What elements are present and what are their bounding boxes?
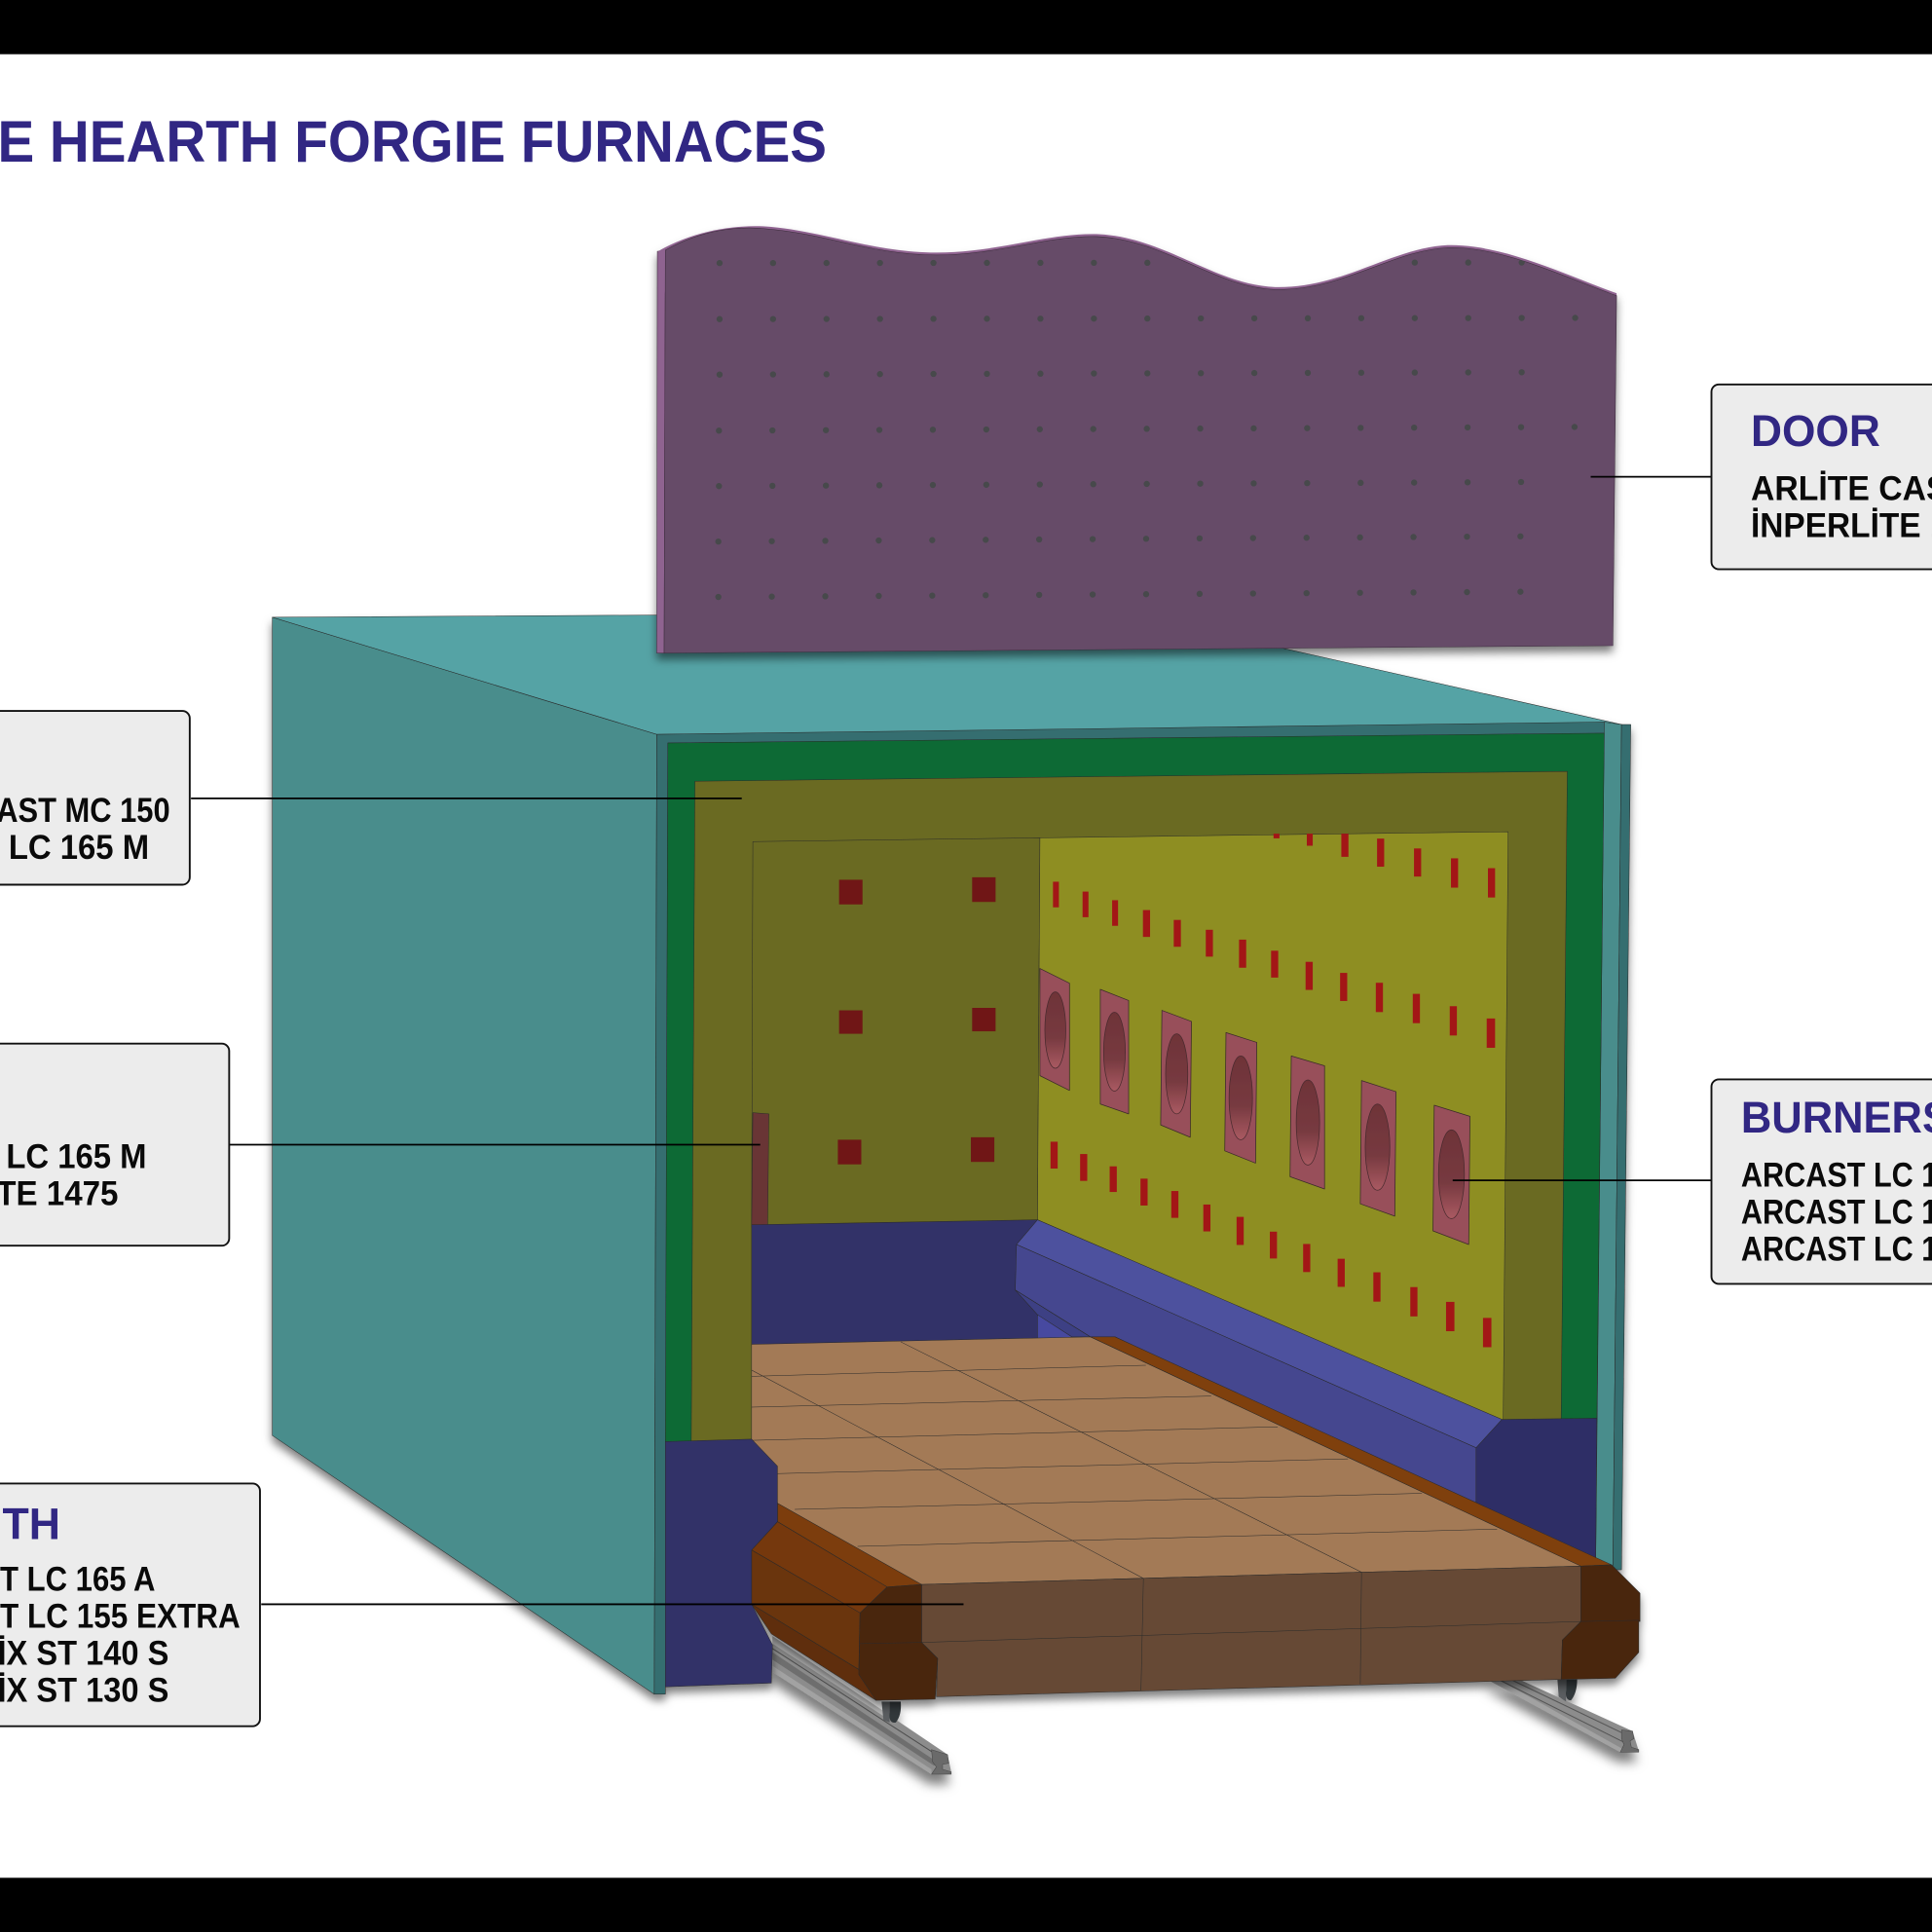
callout: hearth <box>0 1483 260 1727</box>
callout: upper wall <box>0 711 190 884</box>
door side edge <box>656 250 665 653</box>
right wall <box>1037 832 1508 1421</box>
casing front top and left strip <box>654 722 1604 1694</box>
wheel: left <box>881 1701 901 1723</box>
right blue block <box>1476 1418 1597 1567</box>
outer roof <box>273 613 1621 734</box>
leader lines <box>191 477 1712 1604</box>
right wall anchors: second row <box>1054 882 1495 1048</box>
furnace body <box>273 613 1640 1700</box>
rail: left <box>772 1636 951 1774</box>
black band: bottom <box>0 1877 1932 1932</box>
side bench front facet <box>1016 1245 1476 1509</box>
hearth deck <box>752 1337 1580 1584</box>
outer left wall <box>273 617 656 1694</box>
olive lining frame <box>691 771 1567 1444</box>
callout: hearth: T LC 165 A <box>0 1560 155 1599</box>
callout: side wall: LC 165 M <box>6 1137 147 1176</box>
car front-right lower corner <box>1561 1620 1639 1680</box>
door anchor dots <box>719 263 1576 597</box>
car front face <box>921 1566 1580 1696</box>
car front-right upper corner <box>1580 1565 1640 1621</box>
callout: door: DOOR <box>1751 406 1880 456</box>
wheel: right <box>1557 1680 1578 1701</box>
side bench top facet <box>1017 1220 1502 1448</box>
door top edge <box>658 226 1616 296</box>
green insulation frame <box>665 733 1604 1444</box>
side bench chamfer <box>1016 1290 1091 1337</box>
deck tile joints <box>752 1342 1497 1579</box>
callout: hearth: T LC 155 EXTRA <box>0 1596 241 1635</box>
side bench under facet <box>1037 1315 1091 1339</box>
callout: upper wall: AST MC 150 <box>0 791 170 830</box>
car front-left corner <box>859 1584 938 1700</box>
callout: upper wall: LC 165 M <box>9 828 149 867</box>
door panel <box>656 226 1616 653</box>
brown left lower side <box>752 1550 860 1669</box>
callout: burners <box>1712 1079 1932 1283</box>
right wall anchors: bottom row <box>1051 1142 1491 1347</box>
door face <box>664 228 1616 653</box>
callout: hearth: İX ST 130 S <box>0 1670 168 1709</box>
callout: hearth: TH <box>3 1499 60 1548</box>
brown left top strip <box>777 1504 921 1587</box>
brown left bottom chamfer <box>752 1604 876 1700</box>
back wall red squares <box>837 877 995 1165</box>
door jamb red block <box>752 1113 769 1227</box>
black band: top <box>0 0 1932 55</box>
front-left blue block <box>665 1439 777 1687</box>
callout: door <box>1712 385 1932 570</box>
rail: right <box>1487 1680 1639 1752</box>
casing right strip <box>1596 722 1621 1570</box>
back lower blue block <box>752 1220 1037 1346</box>
callout: side wall <box>0 1044 229 1245</box>
burner blocks <box>1040 969 1470 1245</box>
back wall <box>752 837 1040 1227</box>
brown right edge strip <box>1091 1337 1612 1566</box>
title: E HEARTH FORGIE FURNACES <box>0 108 827 174</box>
callout: hearth: İX ST 140 S <box>0 1633 168 1672</box>
brown left upper side <box>752 1522 887 1613</box>
casing right strip dark <box>1613 724 1631 1570</box>
callout: side wall: TE 1475 <box>0 1173 118 1212</box>
right wall anchors: top row <box>1274 835 1495 897</box>
